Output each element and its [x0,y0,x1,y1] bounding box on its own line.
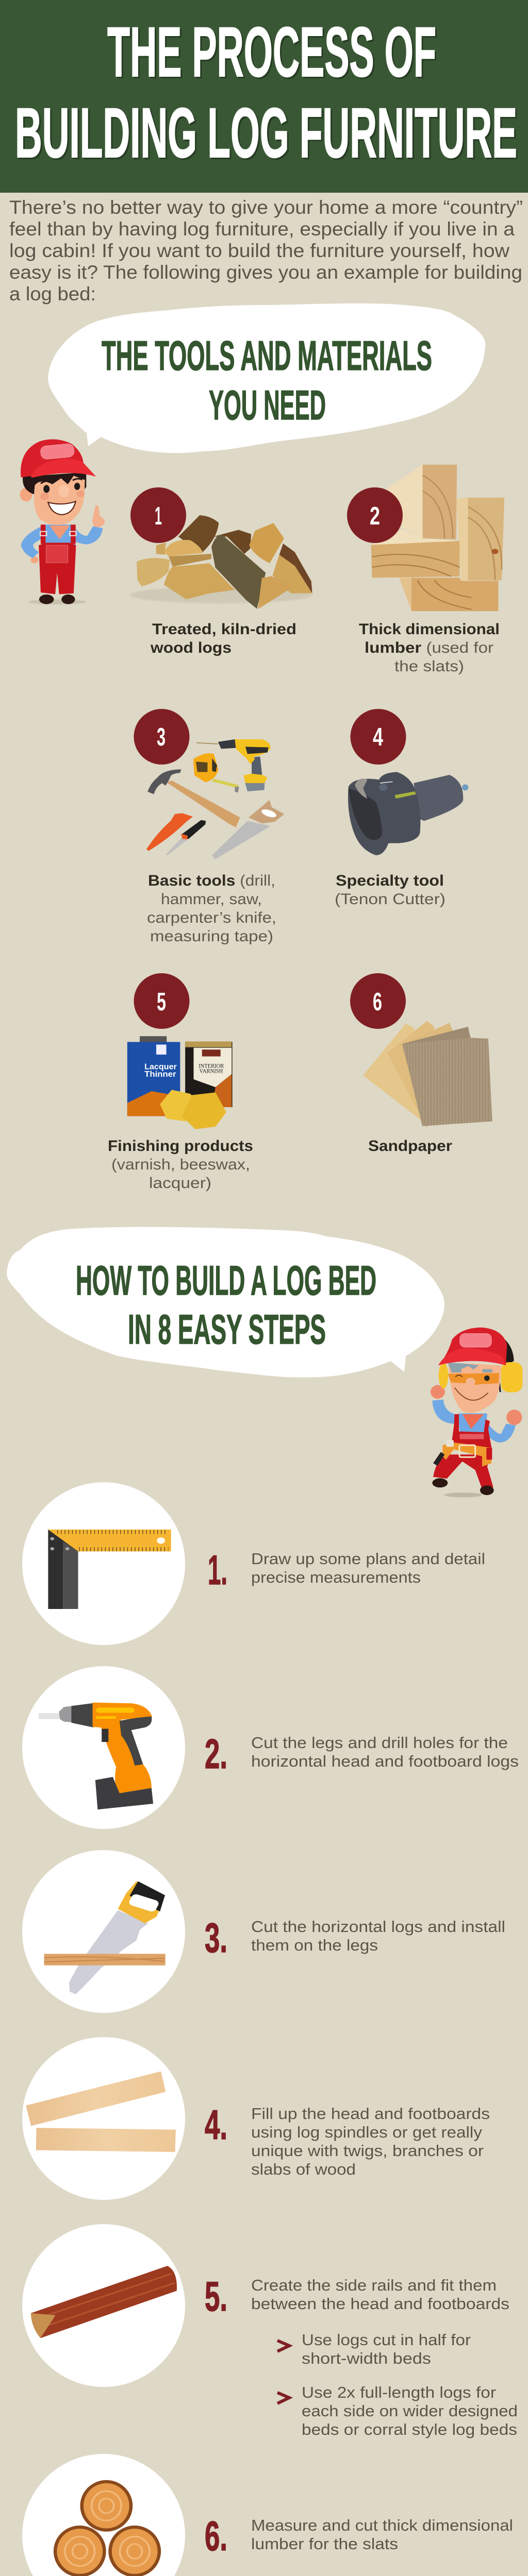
caption 1: wood logs [150,639,232,656]
step 2: 2. [205,1731,227,1777]
step 5 [22,2224,518,2438]
item 5: finishing products: Lacquer [144,1062,177,1071]
step 5: 5. [205,2274,227,2320]
icon: drill [39,1703,153,1809]
caption 2: the slats) [394,658,464,675]
step 6: Measure and cut thick dimensional [251,2516,513,2534]
badge 6 [350,973,406,1029]
heading: how to build [76,1258,376,1353]
item 4: tenon cutter [348,772,468,855]
step 3: Cut the horizontal logs and install [251,1918,505,1936]
step 6: lumber for the slats [251,2535,398,2553]
title [15,13,519,174]
item 5: finishing products: VARNISH [200,1068,223,1074]
badge 1 [130,487,186,543]
step 4: slabs of wood [251,2160,356,2178]
bullet: full-length logs: each side on wider designed [302,2402,518,2420]
badge 5: 5 [157,988,166,1016]
caption 4: (Tenon Cutter) [335,891,446,908]
step 1: 1. [208,1547,227,1594]
step 4: Fill up the head and footboards [251,2105,490,2123]
caption 3: carpenter’s knife, [147,909,276,926]
step 2: Cut the legs and drill holes for the [251,1734,508,1752]
badge 6: 6 [373,988,382,1016]
heading: how to build: IN 8 EASY STEPS [128,1307,326,1353]
item 5: finishing products [127,1036,233,1129]
caption 3 [147,872,276,945]
step 2: horizontal head and footboard logs [251,1752,519,1770]
step 5: Create the side rails and fit them [251,2276,497,2294]
badge 4: 4 [373,723,383,751]
caption 5 [108,1138,253,1192]
step 6: 6. [205,2513,227,2560]
icon: wood boards [26,2071,176,2152]
step 6 [22,2454,513,2576]
caption 1 [150,621,296,656]
caption 3: measuring tape) [150,928,273,945]
item 1: wood logs [130,515,312,609]
step 3: them on the legs [251,1936,378,1954]
bullet: short-width beds: short-width beds [302,2349,431,2367]
intro text [9,197,523,304]
caption 2 [359,621,500,675]
badge 3 [134,709,190,765]
step 1 [22,1482,485,1645]
step 4: using log spindles or get really [251,2123,483,2141]
bullet: full-length logs: Use 2x full-length logs for [302,2383,496,2401]
bullet: full-length logs: beds or corral style log beds [302,2420,517,2438]
step 3: 3. [205,1915,227,1961]
badge 3: 3 [157,723,166,751]
caption 4: Specialty tool [336,872,444,889]
heading: tools and materials: YOU NEED [209,382,326,429]
step 4: 4. [205,2102,227,2148]
character: cheering worker [431,1328,522,1497]
character: pointing worker [20,439,105,604]
item 2: lumber [371,465,504,611]
badge 4 [351,709,406,765]
speech bubble: tools and materials [48,303,486,453]
step 2 [22,1666,519,1829]
intro text: a log bed: [9,283,96,304]
badge 1: 1 [155,502,162,530]
step 5: between the head and footboards [251,2295,509,2313]
intro text: feel than by having log furniture, especially if you live in a [9,218,515,240]
step 4: unique with twigs, branches or [251,2142,484,2160]
step 1: Draw up some plans and detail [251,1550,485,1568]
caption 2: Thick dimensional [359,621,500,638]
item 3: basic tools [146,739,284,859]
header band [0,0,528,193]
heading: tools and materials [102,333,432,429]
step 1: precise measurements [251,1568,421,1586]
badge 2 [347,487,403,543]
caption 3: hammer, saw, [161,891,262,908]
caption 6: Sandpaper [368,1138,452,1155]
intro text: log cabin! If you want to build the furniture yourself, how [9,240,509,261]
icon: carpenter square [48,1530,171,1609]
icon: saw and plank [44,1882,166,1994]
caption 1: Treated, kiln-dried [152,621,296,638]
item 6: sandpaper [363,1021,492,1128]
item 5: finishing products: INTERIOR [199,1063,224,1069]
bullet: short-width beds [277,2331,471,2367]
intro text: easy is it? The following gives you an example for building [9,262,522,283]
caption 3: Basic tools (drill, [148,872,275,889]
caption 5: lacquer) [149,1175,211,1192]
icon: red log [31,2266,177,2338]
badge 5 [134,973,190,1029]
caption 5: (varnish, beeswax, [111,1156,250,1173]
caption 4 [335,872,446,908]
bullet: short-width beds: Use logs cut in half for [302,2331,471,2349]
item 5: finishing products: Thinner [144,1070,176,1078]
bullet: full-length logs [277,2383,518,2438]
step 4 [22,2037,490,2200]
step 3 [22,1850,505,2013]
intro text: There’s no better way to give your home a more “country” [9,197,523,218]
badge 2: 2 [370,502,380,530]
speech bubble: how to build [7,1227,444,1378]
caption 5: Finishing products [108,1138,253,1155]
caption 2: lumber (used for [365,639,493,656]
icon: log rounds [54,2480,161,2576]
